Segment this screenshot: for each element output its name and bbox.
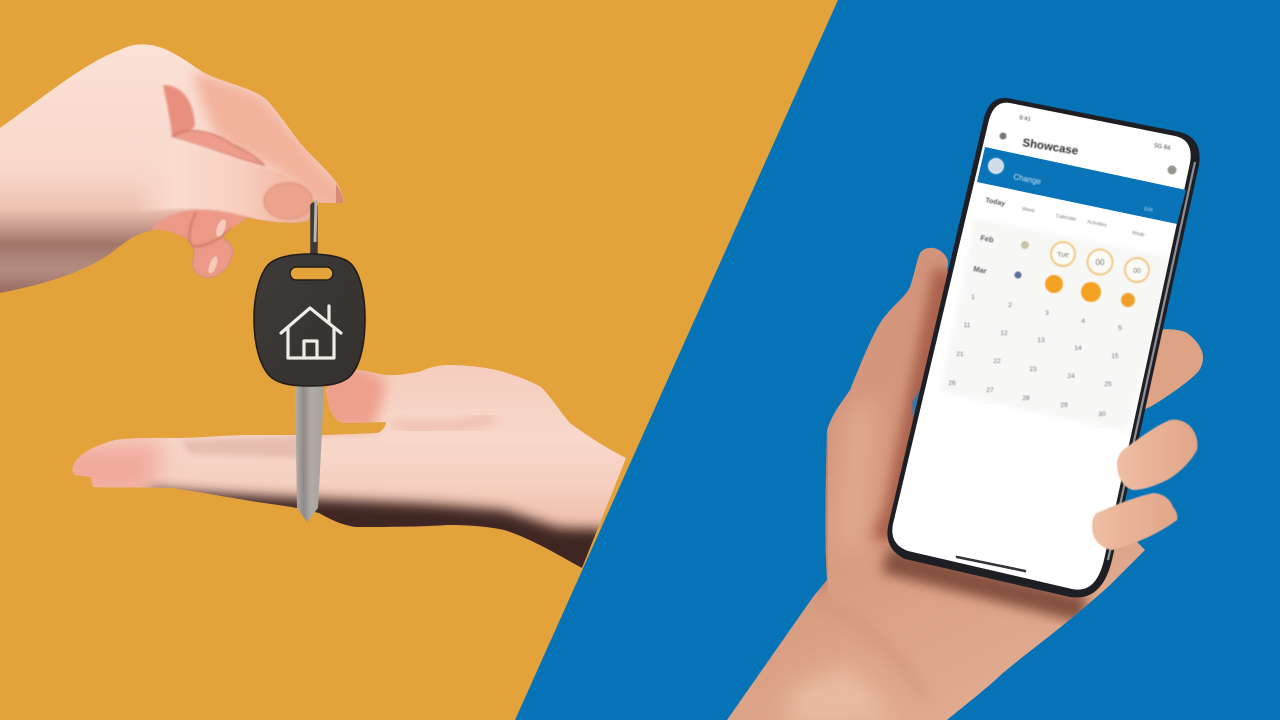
calendar day numbers: 2	[1008, 302, 1012, 309]
finger 2	[1117, 420, 1198, 490]
key blade	[295, 384, 324, 522]
index finger	[192, 70, 350, 207]
calendar tab labels: Mode	[1132, 230, 1145, 238]
illustration: hand holding key ring	[0, 44, 350, 293]
calendar day numbers: 21	[956, 351, 964, 358]
bent knuckle	[163, 85, 195, 137]
calendar day numbers	[948, 294, 1122, 418]
calendar day numbers: 28	[1022, 395, 1030, 402]
calendar day numbers: 30	[1098, 411, 1106, 418]
index fingernail	[336, 184, 343, 204]
illustration: receiving open hand	[72, 365, 626, 568]
finger 3	[1092, 493, 1177, 550]
nail: ring finger	[208, 256, 218, 274]
calendar day numbers: 25	[1104, 381, 1112, 388]
calendar day numbers: 4	[1081, 318, 1085, 325]
calendar tab labels: Week	[1022, 206, 1036, 214]
phone details and labels	[948, 115, 1176, 418]
wrist crease	[815, 600, 925, 700]
shadow beneath phone	[885, 560, 1085, 610]
calendar tab labels: Today	[985, 197, 1006, 208]
illustration: hand behind phone	[727, 248, 1203, 720]
phone	[887, 98, 1200, 598]
background: blue diagonal panel	[515, 0, 1280, 720]
calendar day numbers: 27	[986, 387, 994, 394]
calendar day numbers: 13	[1037, 337, 1045, 344]
calendar tab labels	[985, 197, 1154, 238]
curled fingers	[150, 209, 250, 278]
key fob	[254, 254, 365, 386]
calendar day numbers: 26	[948, 380, 956, 387]
calendar day numbers: 3	[1045, 310, 1049, 317]
calendar markers: 00	[1096, 258, 1105, 267]
calendar day numbers: 23	[1029, 366, 1037, 373]
key ring	[310, 206, 318, 258]
left palm edge shading	[820, 430, 826, 590]
calendar day numbers: 12	[1000, 330, 1008, 337]
thenar shading	[395, 418, 495, 428]
header label: Change	[1013, 172, 1042, 186]
icon: house	[281, 306, 341, 358]
lower shadow	[142, 479, 602, 568]
calendar day numbers: 15	[1111, 353, 1119, 360]
status text: signal: 5G 84	[1154, 143, 1171, 152]
settings icon	[1168, 166, 1176, 174]
illustration: fingers over phone	[1092, 420, 1198, 550]
calendar area	[940, 218, 1176, 432]
thumb	[128, 137, 312, 223]
finger crease shading	[180, 436, 300, 458]
palm highlight	[838, 400, 875, 550]
app title: Showcase	[1022, 137, 1079, 158]
status text: time: 9:41	[1019, 115, 1032, 123]
header avatar icon	[988, 158, 1004, 174]
calendar markers: 00	[1133, 268, 1141, 275]
gap between hand and phone	[912, 388, 921, 420]
calendar day numbers: 24	[1067, 373, 1075, 380]
blue app header	[977, 147, 1186, 224]
finger behind phone	[1120, 329, 1203, 420]
calendar markers: Tue	[1057, 252, 1069, 259]
thumb nail	[264, 183, 312, 219]
phone edge highlight	[1108, 162, 1195, 560]
curled finger crease	[189, 212, 232, 246]
shadow along phone left edge	[880, 270, 945, 540]
middle finger gap	[172, 131, 264, 165]
calendar tab labels: Activities	[1087, 219, 1108, 229]
calendar row labels: Feb	[980, 233, 995, 245]
calendar day numbers: 5	[1118, 325, 1122, 332]
wrist highlight	[790, 665, 895, 720]
calendar tab labels: Edit	[1144, 206, 1154, 214]
calendar markers	[1014, 241, 1149, 307]
menu icon	[1000, 132, 1006, 140]
thumb shading	[315, 365, 385, 432]
illustration: house key	[254, 200, 365, 522]
calendar row labels: Mar	[973, 264, 988, 276]
calendar day numbers: 22	[993, 358, 1001, 365]
calendar day numbers: 29	[1060, 402, 1068, 409]
calendar tab labels: Calendar	[1056, 213, 1077, 223]
calendar day numbers: 11	[964, 322, 971, 329]
key fob slot	[290, 267, 333, 280]
calendar day numbers: 14	[1074, 345, 1082, 352]
fingertip shading	[72, 438, 172, 488]
nail: middle finger	[216, 219, 226, 237]
phone screen	[892, 103, 1191, 590]
phone body	[887, 98, 1200, 598]
home indicator	[957, 557, 1025, 571]
calendar row labels	[973, 233, 995, 276]
calendar day numbers: 1	[971, 294, 975, 301]
